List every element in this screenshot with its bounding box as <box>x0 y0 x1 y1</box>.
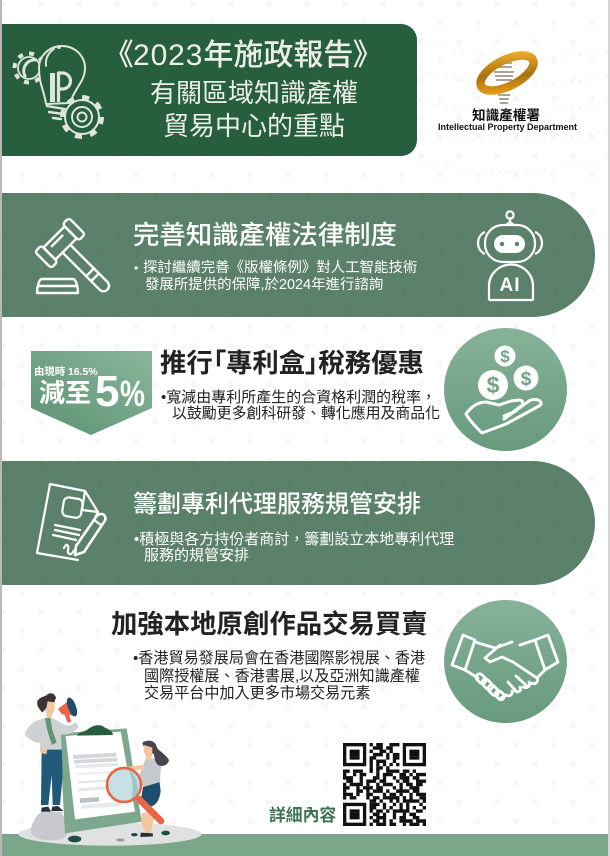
bottom bar <box>2 834 608 856</box>
label: details: 詳細內容 <box>269 806 336 825</box>
text block: trading: •香港貿易發展局會在香港國際影視展、香港 <box>133 650 425 667</box>
document board <box>59 728 142 833</box>
clip mound <box>77 725 113 736</box>
woman <box>141 812 155 834</box>
heading: trading of original works: 加強本地原創作品交易買賣 <box>111 609 428 639</box>
logo mark: gold ring <box>476 51 538 104</box>
panel: legal system <box>2 193 595 317</box>
badge numeral: 5 <box>95 367 119 416</box>
QR code <box>343 743 426 826</box>
icon: AI robot: AI <box>500 275 520 296</box>
title line 3: 貿易中心的重點 <box>163 111 345 141</box>
right page edge <box>608 0 610 856</box>
magnifier <box>139 799 161 821</box>
icon: gavel <box>34 218 110 294</box>
logo: Intellectual Property Department <box>438 51 577 132</box>
icon: IP light bulb with gears <box>12 45 104 139</box>
icon: coins in hand: $ <box>521 369 532 390</box>
text block: 探討繼續完善《版權條例》對人工智能技術 <box>143 260 417 276</box>
text block: trading <box>133 650 425 702</box>
icon: coins in hand: $ <box>487 372 500 398</box>
text block: patent box: •寬減由專利所產生的合資格利潤的稅率， <box>161 390 436 406</box>
illustration: people with document and magnifier <box>18 693 202 846</box>
text block <box>143 260 417 293</box>
badge percent sign: % <box>120 373 145 414</box>
logo English name: Intellectual Property Department <box>438 122 577 132</box>
dotted background curves <box>419 39 608 173</box>
badge: rate reduced to 5% <box>31 351 152 435</box>
ground stones <box>68 831 170 842</box>
text block: 服務的規管安排 <box>144 547 249 564</box>
text block: patent box: 以鼓勵更多創科研發、轉化應用及商品化 <box>172 406 440 422</box>
badge large text: 減至 <box>39 378 91 408</box>
ground <box>18 822 202 846</box>
badge ribbon shape <box>31 351 152 435</box>
heading: 完善知識產權法律制度 <box>133 220 397 250</box>
heading: 籌劃專利代理服務規管安排 <box>133 491 421 518</box>
left page edge <box>0 0 2 856</box>
panel: patent agency regulation <box>2 461 595 585</box>
text block <box>134 531 454 564</box>
panel: header <box>2 24 417 156</box>
text block: trading: 交易平台中加入更多市場交易元素 <box>144 685 370 702</box>
badge small text: 由現時 16.5% <box>34 367 98 378</box>
icon: coins in hand <box>444 328 567 451</box>
icon: document and pen <box>36 482 107 562</box>
man <box>41 748 63 805</box>
rock <box>31 811 70 840</box>
title line 1: 《2023年施政報告》 <box>118 39 368 72</box>
text block: patent box <box>161 389 440 422</box>
title line 2: 有關區域知識產權 <box>150 78 358 108</box>
document lines <box>73 753 122 809</box>
icon: AI robot <box>476 210 544 302</box>
text bullet: • <box>134 261 138 275</box>
icon: coins in hand: $ <box>500 347 510 366</box>
heading: patent box: 推行「專利盒」稅務優惠 <box>160 348 424 378</box>
megaphone <box>58 701 74 716</box>
text block: •積極與各方持份者商討，籌劃設立本地專利代理 <box>134 531 454 548</box>
icon: handshake <box>444 600 567 723</box>
text block: 發展所提供的保障,於2024年進行諮詢 <box>145 277 383 293</box>
text block: trading: 國際授權展、香港書展,以及亞洲知識產權 <box>144 668 420 684</box>
logo Chinese name: 知識產權署 <box>472 108 540 123</box>
